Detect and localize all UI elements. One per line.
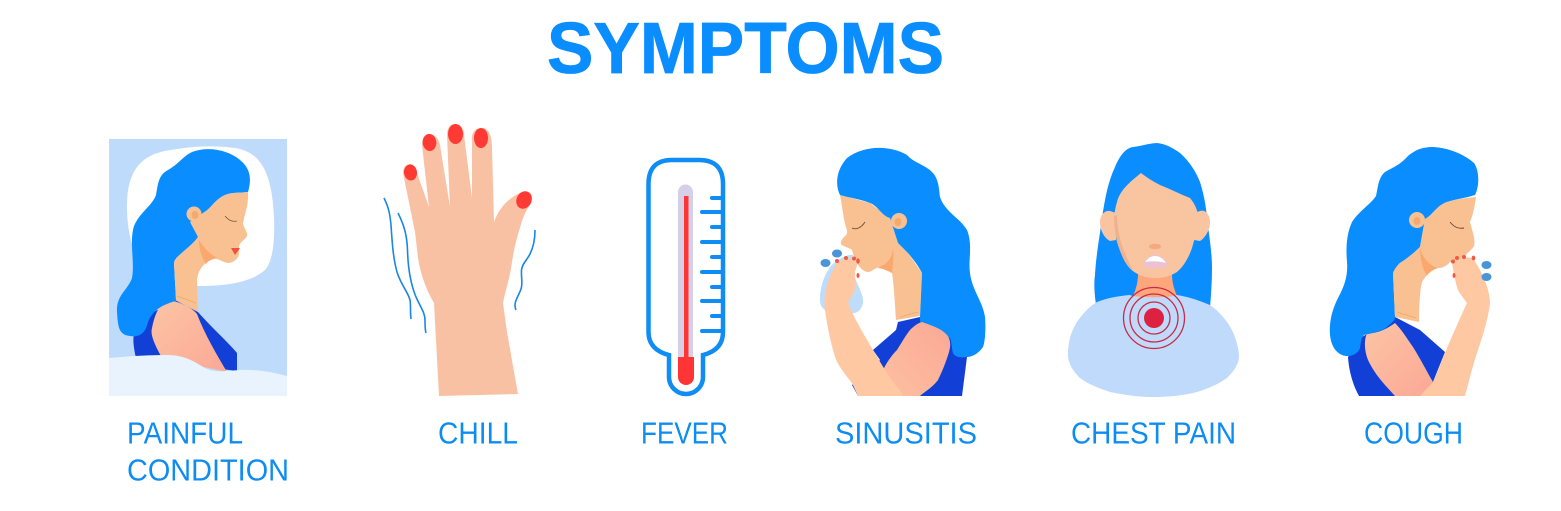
neck and face <box>840 195 922 320</box>
label: painful condition: PAINFUL <box>127 416 243 450</box>
nose <box>1149 244 1161 249</box>
panel: cough <box>1330 147 1492 396</box>
label: chill: CHILL <box>438 416 518 450</box>
label: painful condition <box>127 416 289 488</box>
shiver lines <box>384 198 535 333</box>
arm <box>152 301 227 372</box>
label: painful condition: CONDITION <box>127 452 289 488</box>
droplets <box>820 250 842 267</box>
neck <box>1132 274 1178 298</box>
fingernails <box>835 256 860 278</box>
ear <box>1409 212 1425 228</box>
nails <box>403 124 535 211</box>
panel: sinusitis <box>820 148 985 396</box>
necklace <box>177 296 196 303</box>
jaw shadow <box>199 240 217 264</box>
thermometer outline <box>648 160 723 394</box>
mercury <box>678 196 694 385</box>
ears <box>1100 211 1210 241</box>
pillow <box>127 146 274 286</box>
label: sinusitis: SINUSITIS <box>835 416 977 450</box>
closed eye <box>225 216 237 221</box>
hair <box>117 149 250 336</box>
panel: chest pain <box>1068 143 1239 397</box>
hair <box>837 148 985 357</box>
fingernails <box>1451 255 1475 278</box>
hair <box>1094 143 1212 308</box>
jaw shadow <box>877 248 893 273</box>
necklace <box>1397 312 1416 318</box>
upper arm <box>1365 323 1433 396</box>
label: fever: FEVER <box>641 416 728 450</box>
dress <box>852 317 967 396</box>
head and neck <box>1393 197 1476 322</box>
label: chest pain: CHEST PAIN <box>1071 416 1236 450</box>
pain target rings <box>1124 288 1184 348</box>
forearm and hand <box>824 258 903 396</box>
hand <box>403 124 532 396</box>
dress <box>133 300 237 371</box>
panel: fever thermometer <box>648 160 723 394</box>
inner tube <box>678 185 693 360</box>
hair <box>1330 147 1478 356</box>
dress <box>1348 317 1445 396</box>
panel: painful condition <box>109 139 287 396</box>
closed eye <box>852 222 865 229</box>
shoulders <box>1068 295 1239 397</box>
background card <box>109 139 287 396</box>
title: SYMPTOMS <box>547 8 944 89</box>
closed eye <box>1450 222 1464 228</box>
forearm and hand <box>1420 257 1490 396</box>
lips <box>231 248 240 255</box>
ear <box>186 206 202 222</box>
mouth <box>1143 255 1168 268</box>
label: cough: COUGH <box>1364 416 1463 450</box>
face shading <box>1114 215 1133 270</box>
ear <box>891 213 907 229</box>
panel: chill hand <box>384 124 535 396</box>
upper arm <box>883 322 950 396</box>
tissue <box>820 255 863 313</box>
droplets <box>1482 261 1492 281</box>
blanket <box>109 355 287 396</box>
head and neck <box>174 192 248 312</box>
necklace <box>900 312 918 317</box>
face <box>1114 173 1198 278</box>
jaw shadow <box>1420 247 1438 276</box>
scale ticks <box>702 198 722 331</box>
